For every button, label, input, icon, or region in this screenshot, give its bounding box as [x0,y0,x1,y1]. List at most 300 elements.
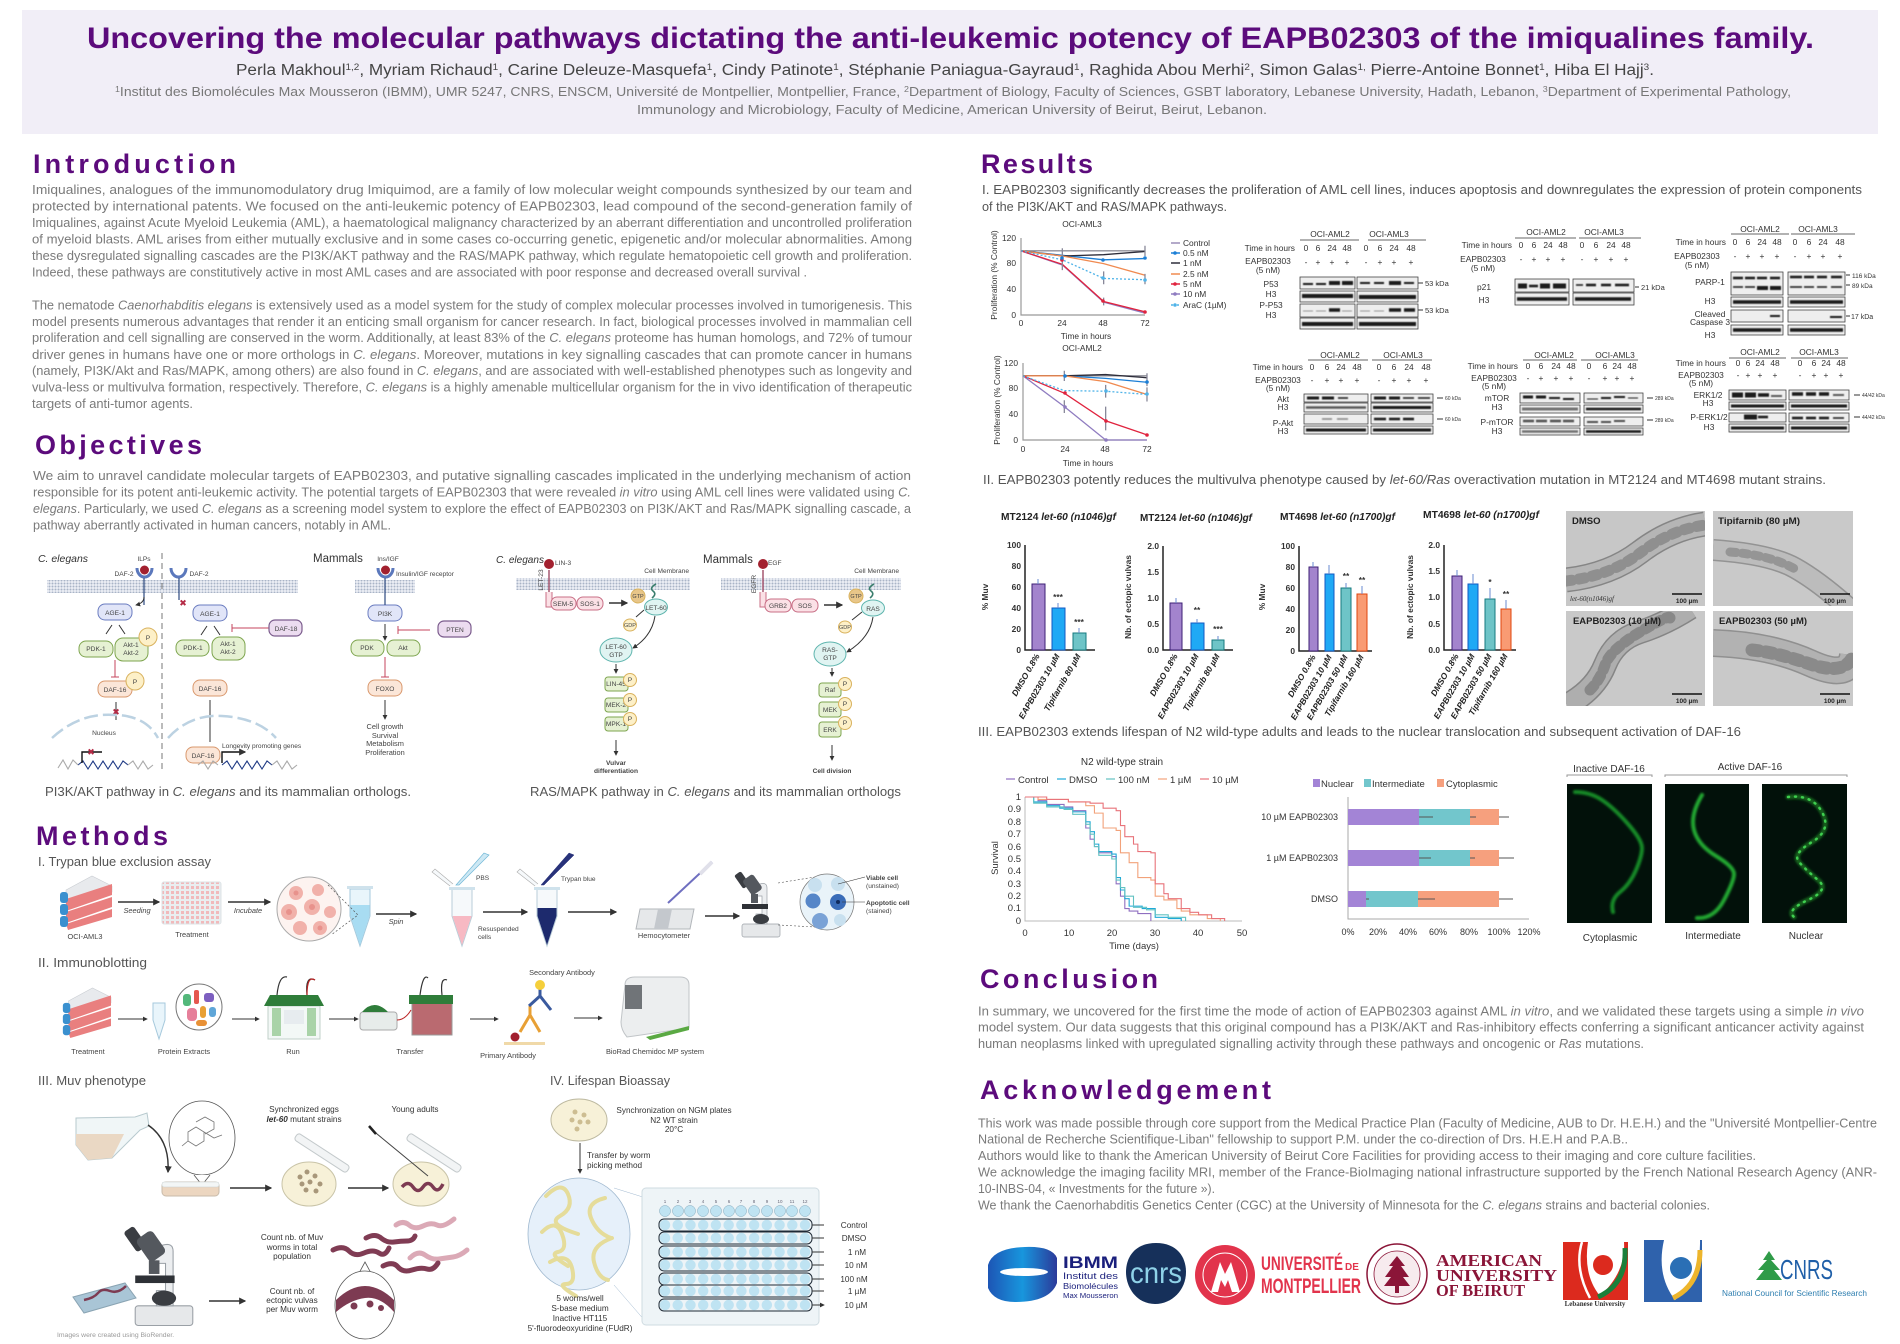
icon: tube with PBS: Resuspended [478,926,519,933]
icon: cells magnified [277,877,341,941]
micrograph: EAPB02303 10 µM: EAPB02303 (10 µM) [1573,616,1661,627]
diagram: PI3K/AKT pathway [38,553,471,770]
western blot: mTOR panel: (5 nM) [1482,381,1506,391]
western blot: PARP and caspase panel: - [1794,251,1797,261]
bar chart: MT4698 ectopic vulvas: 1.5 [1428,566,1440,576]
text: synchronization [616,1106,732,1134]
legend: concentrations: 10 nM [1183,289,1206,299]
bar chart: MT4698 ectopic vulvas: Nb. of ectopic vulvas [1405,555,1415,639]
stacked bar chart: DAF-16 localisation: 0% [1341,927,1355,937]
RAS activation: RAS [866,606,880,613]
bar chart: MT2124 ectopic vulvas: 2.0 [1147,541,1159,551]
text block: acknowledgement: This work was made possible through core support from the Medical Practice Plan (Faculty of Medicine, AUB to Dr. H.E.H.) and the "Université Montpellier-Centre [978,1116,1877,1130]
legend: concentrations [1171,238,1227,310]
western blot: Akt panel: (5 nM) [1266,383,1290,393]
western blot: PARP and caspase panel: H3 [1705,330,1716,340]
western blot: mTOR panel: mTOR [1485,393,1509,403]
western blot: Akt panel: + [1424,375,1429,385]
stacked bar chart: DAF-16 localisation [1261,779,1541,937]
survival chart: Time (days) [1109,941,1159,952]
western blot: ERK panel: (5 nM) [1689,378,1713,388]
survival chart: 20 [1107,928,1117,939]
header: active DAF-16: Active DAF-16 [1718,762,1783,773]
western blot: PARP and caspase panel: PARP-1 [1695,277,1725,287]
bar chart: MT4698 ectopic vulvas: DMSO 0.8% [1428,652,1461,698]
text block: objectives [33,469,911,532]
icon: hemocytometer [636,862,712,940]
survival legend: 1 µM [1170,775,1191,786]
line chart: OCI-AML3 proliferation: OCI-AML3 [1062,219,1102,229]
plate row labels: Control [841,1221,867,1230]
fluorescence panels: DAF-16 [1567,762,1847,944]
fluorescence panels: DAF-16: Cytoplasmic [1583,933,1637,944]
western blot: PARP and caspase panel: OCI-AML2 [1740,224,1780,234]
western blot: mTOR panel: - [1588,373,1591,383]
western blot: PARP and caspase panel: + [1807,251,1812,261]
text: synchronized eggs [266,1105,342,1124]
icon: tube with PBS: cells [478,934,492,941]
micrograph: DMSO: DMSO [1572,516,1600,527]
RAS activation: RAS- [822,647,838,654]
text block: introduction: these dysregulated signalling cascades are the PI3K/AKT pathway and the RAS/MAPK pathway, which regulate hematopoietic cell growth and proliferation. [32,249,912,263]
western blot: mTOR panel: 6 [1539,361,1544,371]
icon: flask [63,988,111,1038]
western blot: PARP and caspase panel: EAPB02303 [1674,251,1720,261]
panel: intermediate worm [1665,784,1749,923]
survival chart: 0.9 [1008,804,1021,815]
kinase cascade: C. elegans [605,674,636,731]
western blot: p21 panel: + [1624,254,1629,264]
logo: CNRS [1126,1243,1186,1304]
western blot: ERK panel: P-ERK1/2 [1690,412,1728,422]
authors: Perla Makhoul [236,62,335,79]
legend: concentrations: 1 nM [1183,258,1202,268]
nodes: AGE-1: AGE-1 [200,611,220,618]
icon: 96-well plate: 5 [715,1199,718,1204]
legend: cell staining: (stained) [866,908,892,915]
western blot: mTOR panel: + [1569,373,1574,383]
survival chart: 0 [1016,916,1021,927]
survival chart: Survival [990,841,1001,875]
authors: 1 [1074,62,1080,72]
western blot: P53 panel: 0 [1304,243,1309,253]
text: count vulvas: ectopic vulvas [266,1296,318,1305]
text: synchronization: N2 WT strain [650,1116,698,1125]
authors: . [1649,62,1654,79]
western blot: PARP and caspase panel: + [1821,251,1826,261]
micrograph: EAPB02303 10 µM [1566,608,1705,706]
bar chart: MT4698 ectopic vulvas: 2.0 [1428,540,1440,550]
western blot: Akt panel: + [1339,375,1344,385]
authors: 2 [1244,62,1250,72]
western blot: p21 panel: 24 [1606,240,1616,250]
icon: 96-well plate: 9 [766,1199,769,1204]
western blot: p21 panel: + [1609,254,1614,264]
icon: 96-well plate: 12 [802,1199,808,1204]
survival legend: Control [1018,775,1049,786]
outcome: vulvar differentiation [594,760,638,775]
bar chart: MT2124 percent Muv: 80 [1012,561,1021,571]
LET-60 activation: GDP [624,623,636,629]
GRB2 and SOS [765,599,818,612]
icon: stained cells [778,874,854,930]
bar chart: MT4698 percent Muv: EAPB02303 50 µM [1304,652,1350,722]
survival chart: 0.4 [1008,866,1021,877]
western blot: P53 panel: P-P53 [1259,300,1283,310]
western blot: p21 panel: OCI-AML2 [1526,227,1566,237]
line chart: OCI-AML3 proliferation: 120 [1002,233,1016,243]
bar chart: MT2124 percent Muv: % Muv [980,583,990,610]
western blot: ERK panel: - [1799,370,1802,380]
western blot: mTOR panel: + [1603,373,1608,383]
western blot: Akt panel: Akt [1277,394,1290,404]
bar chart: MT2124 percent Muv: 100 [1007,540,1021,550]
western blot: ERK panel: Time in hours [1676,358,1726,368]
western blot: mTOR panel: Time in hours [1468,361,1518,371]
western blot: ERK panel: + [1758,370,1763,380]
logo: IBMM: Institut des [1063,1271,1118,1282]
bar chart: MT4698 percent Muv: ** [1343,571,1350,581]
western blot: PARP and caspase panel: - [1734,251,1737,261]
western blot: p21 panel: (5 nM) [1471,263,1495,273]
plate row labels: 1 µM [848,1287,866,1296]
logo: Université de Montpellier: DE [1345,1262,1359,1273]
line chart: OCI-AML2 proliferation: 72 [1142,444,1152,454]
western blot: p21 panel: 48 [1558,240,1568,250]
mammalian outcomes: Cell growth [367,722,403,731]
western blot: p21 panel: - [1581,254,1584,264]
bar chart: MT4698 ectopic vulvas [1405,510,1541,721]
western blot: ERK panel: 44/42 kDa [1862,393,1885,399]
survival chart: 0.5 [1008,854,1021,865]
western blot: mTOR panel: P-mTOR [1481,417,1513,427]
diagram: PI3K/AKT pathway: Longevity promoting genes [222,743,302,750]
icon: protein extracts [153,984,222,1056]
text block: objectives: pathway aberrantly activated in human cancers, notably in AML. [33,518,391,532]
survival chart: 40 [1193,928,1203,939]
western blot: Akt panel: - [1311,375,1314,385]
survival legend: DMSO [1069,775,1098,786]
stacked bar chart: DAF-16 localisation: 80% [1460,927,1478,937]
icon: 96-well plate: 6 [728,1199,731,1204]
western blot: p21 panel: 24 [1543,240,1553,250]
plate row labels [812,1221,868,1310]
survival chart: 0.6 [1008,842,1021,853]
western blot: p21 panel: + [1594,254,1599,264]
western blot: mTOR panel: 24 [1612,361,1622,371]
text block: objectives: responsible for its potent anti-leukemic activity. The potential targets of EAPB02303 that were revealed in vitro using AML cell lines were validated using C. [33,486,911,500]
nodes: kinases: Akt-2 [220,649,236,656]
icon: tube with trypan blue: Trypan blue [561,876,596,883]
nodes: AGE-1 [98,604,402,621]
affiliations: Institut des Biomolécules Max Mousseron (IBMM), UMR 5247, CNRS, ENSCM, Université de Montpellier, Montpellier, France, [120,85,904,99]
icon: vulva zoom [335,1262,395,1339]
nodes: AGE-1: AGE-1 [105,610,125,617]
text block: acknowledgement: We thank the Caenorhabditis Genetics Center (CGC) at the University of Minnesota for the C. elegans strains and bacterial colonies. [978,1198,1710,1212]
icon: 96-well plate: 11 [790,1199,795,1204]
diagram: RAS/MAPK pathway: Cell Membrane [854,568,899,575]
mammalian receptor [377,556,455,605]
text: culture conditions: 5 worms/well [556,1294,604,1303]
western blot: Akt panel: + [1407,375,1412,385]
western blot: p21 panel: H3 [1479,295,1490,305]
western blot: Akt panel: Time in hours [1253,362,1303,372]
line chart: OCI-AML2 proliferation: 24 [1060,444,1070,454]
bar chart: MT2124 ectopic vulvas: Tipifarnib 80 µM [1181,651,1222,713]
fluorescence panels: DAF-16: Intermediate [1685,931,1741,942]
western blot: p21 panel: + [1546,254,1551,264]
legend: concentrations: 5 nM [1183,279,1202,289]
affiliations: 3 [1543,85,1548,94]
western blot: PARP and caspase panel: 89 kDa [1852,283,1873,290]
micrograph: DMSO: 100 µm [1676,598,1698,605]
text block: acknowledgement: National de Recherche Scientifique-Liban" fellowship to support P.M. under the co-direction of Drs. H.E.H and P.A.B.. [978,1132,1628,1146]
western blot: Akt panel: + [1325,375,1330,385]
western blot: mTOR panel [1468,350,1674,436]
authors: 1,2 [346,62,359,72]
logo: IBMM: Biomolécules [1063,1281,1118,1291]
western blot: mTOR panel: H3 [1492,402,1503,412]
bar chart: MT2124 percent Muv: 40 [1012,603,1021,613]
authors: 1 [833,62,839,72]
bar chart: MT2124 percent Muv: *** [1053,592,1064,602]
western blot: mTOR panel: OCI-AML2 [1534,350,1574,360]
line chart: OCI-AML3 proliferation: 0 [1011,310,1016,320]
LET-60 activation [600,584,668,662]
outcome: cell division: Cell division [813,768,851,775]
western blot: p21 panel: + [1532,254,1537,264]
line chart: OCI-AML3 proliferation: 0 [1019,318,1024,328]
text block: conclusion: In summary, we uncovered for the first time the mode of action of EAPB02303 against AML in vitro, and we validated these targets using a simple in vivo [978,1004,1864,1018]
western blot: mTOR panel: 48 [1627,361,1637,371]
nucleus membrane arcs [52,715,276,738]
western blot: PARP and caspase panel: 116 kDa [1852,273,1876,280]
text block: introduction: driver genes in humans have one or more orthologs in C. elegans. Moreover, mutations in key signalling cascades that can promote cancer in humans [32,348,912,362]
plate row labels: 10 nM [845,1261,868,1270]
authors: , Hiba El Hajj [1545,62,1644,79]
western blot: mTOR panel: 0 [1587,361,1592,371]
affiliations: 2 [904,85,910,94]
bar chart: MT4698 ectopic vulvas: EAPB02303 10 µM [1431,651,1477,721]
western blot: ERK panel: - [1737,370,1740,380]
kinase cascade: mammals: P [843,681,848,688]
western blot: ERK panel: 48 [1836,358,1846,368]
icon: microscope with slide [73,1226,193,1325]
GRB2 and SOS: SOS [798,603,813,610]
western blot: Akt panel: 60 kDa [1445,396,1461,402]
logo: American University of Beirut: UNIVERSITY [1436,1266,1557,1285]
western blot: ERK panel: 0 [1736,358,1741,368]
western blot: P53 panel: H3 [1266,289,1277,299]
western blot: Akt panel: H3 [1278,426,1289,436]
nodes: DAF-16 and FOXO: DAF-16 [192,753,215,760]
nodes: DAF-16 and FOXO: P [133,679,138,686]
western blot: PARP and caspase panel: 24 [1757,237,1767,247]
line chart: OCI-AML3 proliferation: 24 [1057,318,1067,328]
diagram: RAS/MAPK pathway: C. elegans [496,555,544,566]
icon: 96-well plate: 7 [740,1199,743,1204]
bar chart: MT2124 percent Muv: MT2124 let-60 (n1046)gf [1001,512,1118,523]
western blot: mTOR panel: + [1554,373,1559,383]
western blot: PARP and caspase panel [1674,224,1876,340]
LET-60 activation: GTP [609,652,623,659]
western blot: P53 panel: 48 [1406,243,1416,253]
stacked bar legend: Intermediate [1372,779,1425,790]
text: transfer: picking method [587,1161,643,1170]
bar chart: MT2124 percent Muv: 60 [1012,582,1021,592]
western blot: Akt panel: OCI-AML2 [1320,350,1360,360]
authors: 1 [1539,62,1545,72]
icon: 96-well plate: 10 [777,1199,783,1204]
text block: introduction: targets of anti-tumor agents. [32,397,193,411]
nodes: DAF-16 and FOXO [98,672,402,763]
logo: CNRS: cnrs [1130,1257,1182,1290]
western blot: ERK panel: + [1746,370,1751,380]
western blot: ERK panel: 24 [1755,358,1765,368]
authors: 1 [707,62,712,72]
stacked bar chart: DAF-16 localisation: 1 µM EAPB02303 [1266,853,1338,863]
bar chart: MT2124 percent Muv: EAPB02303 10 µM [1016,651,1062,721]
western blot: PARP and caspase panel: + [1746,251,1751,261]
western blot: ERK panel: 48 [1770,358,1780,368]
plate row labels: 1 nM [848,1248,866,1257]
authors: , Cindy Patinote [712,62,833,79]
text block: introduction: Imiqualines, analogues of the immunomodulatory drug Imiquimod, are a family of low molecular weight compounds synthesized by our team and [32,183,912,197]
title: Uncovering the molecular pathways dictating the anti-leukemic potency of EAPB02303 of the imiqualines family. [87,22,1814,55]
legend: concentrations: Control [1183,238,1210,248]
icon: power supply and transfer tank: Transfer [396,1047,424,1056]
text: synchronization: 20°C [665,1125,683,1134]
icon: worm dish with picker [369,1126,462,1206]
western blot: p21 panel: - [1520,254,1523,264]
bar chart: MT4698 ectopic vulvas: Tipifarnib 160 µM [1466,651,1510,717]
western blot: Akt panel: + [1355,375,1360,385]
diagram: PI3K/AKT pathway: Nucleus [92,730,117,737]
LET-23 receptor [538,559,571,607]
bar chart: MT2124 percent Muv: Tipifarnib 80 µM [1042,651,1083,713]
authors: , Stéphanie Paniagua-Gayraud [839,62,1074,79]
western blot: ERK panel: H3 [1703,398,1714,408]
western blot: PARP and caspase panel: + [1760,251,1765,261]
methods IV: lifespan bioassay [528,1073,868,1333]
survival chart: 1 [1016,792,1021,803]
western blot: Akt panel: EAPB02303 [1255,375,1301,385]
nodes: kinases [79,628,420,661]
legend: cell staining [838,875,910,915]
authors: , Myriam Richaud [359,62,493,79]
logo: American University of Beirut: AMERICAN [1436,1251,1543,1270]
line chart: OCI-AML3 proliferation: 40 [1007,284,1016,294]
SEM-5 and SOS-1 [551,597,603,610]
DNA strands [58,752,297,769]
western blot: P53 panel [1245,229,1450,329]
western blot: mTOR panel: 289 kDa [1655,418,1674,424]
bar chart: MT2124 ectopic vulvas: *** [1213,624,1224,634]
survival chart: N2 wild-type strain [1081,757,1163,768]
stacked bar legend: Cytoplasmic [1446,779,1498,790]
western blot: ERK panel: 44/42 kDa [1862,415,1885,421]
diagram: PI3K/AKT pathway: Mammals [313,553,363,565]
western blot: mTOR panel: 289 kDa [1655,396,1674,402]
RAS activation: GTP [850,594,862,600]
western blot: mTOR panel: 48 [1566,361,1576,371]
plate row labels: 10 µM [845,1301,868,1310]
micrograph: EAPB02303 50 µM [1713,611,1853,706]
legend: concentrations: 0.5 nM [1183,248,1209,258]
survival chart: 30 [1150,928,1160,939]
western blot: P53 panel: 24 [1389,243,1399,253]
western blot: Akt panel: OCI-AML3 [1383,350,1423,360]
icon: antibodies: Primary Antibody [480,1051,536,1060]
bar chart: MT2124 percent Muv: 0 [1016,645,1021,655]
western blot: ERK panel: + [1773,370,1778,380]
western blot: PARP and caspase panel: + [1775,251,1780,261]
stacked bar chart: DAF-16 localisation: 40% [1399,927,1417,937]
western blot: mTOR panel: 24 [1551,361,1561,371]
methods I: trypan blue assay [38,853,910,946]
stacked bar chart: DAF-16 localisation: DMSO [1311,894,1338,904]
GRB2 and SOS: GRB2 [769,603,787,610]
methods I: trypan blue assay: I. Trypan blue exclusion assay [38,854,212,869]
nodes: DAF-16 and FOXO: DAF-16 [199,686,222,693]
kinase cascade: C. elegans: MEK-2 [606,702,626,709]
authors: 3 [1644,62,1649,72]
bar chart: MT2124 ectopic vulvas: ** [1194,605,1201,615]
western blot: p21 panel: Time in hours [1462,240,1512,250]
icon: centrifuge tube [328,885,373,946]
western blot: ERK panel: ERK1/2 [1694,390,1723,400]
western blot: mTOR panel: H3 [1492,426,1503,436]
micrograph: EAPB02303 50 µM: 100 µm [1824,698,1846,705]
nodes: kinases: Akt-2 [123,650,139,657]
kinase cascade: mammals: P [843,701,848,708]
nodes: DAF-18 and PTEN: PTEN [446,627,464,634]
authors: , Carine Deleuze-Masquefa [498,62,707,79]
western blot: ERK panel: EAPB02303 [1678,370,1724,380]
western blot: ERK panel [1676,347,1885,432]
logo: American University of Beirut [1367,1244,1557,1304]
logo: Lebanese University: Lebanese University [1565,1300,1626,1308]
panel: nuclear worm [1762,784,1847,923]
EGFR receptor: EGFR [751,575,758,593]
line chart: OCI-AML3 proliferation: 48 [1098,318,1108,328]
western blot: PARP and caspase panel: 17 kDa [1851,314,1873,321]
authors: , Simon Galas [1250,62,1358,79]
survival legend [1006,775,1239,786]
logo: Université de Montpellier: UNIVERSITÉ [1261,1253,1343,1275]
western blot: p21 panel: 6 [1532,240,1537,250]
nodes: kinases: PDK-1 [86,646,106,653]
text block: introduction: Imiqualines, against Acute Myeloid Leukemia (AML), a haematological malignancy characterized by an aberrant differentiation and uncontrolled proliferation [32,216,912,230]
text block: acknowledgement: We acknowledge the imaging facility MRI, member of the France-BioImaging national infrastructure supported by the French National Research Agency (ANR- [978,1166,1877,1180]
icon: culture flask [60,876,112,930]
caption: PI3K/AKT: PI3K/AKT pathway in C. elegans and its mammalian orthologs. [45,784,411,799]
western blot: PARP and caspase panel: + [1838,251,1843,261]
text: culture conditions: Inactive HT115 [553,1314,608,1323]
icon: tube with PBS [432,853,519,946]
text block: objectives: We aim to unravel candidate molecular targets of EAPB02303, and putative signalling cascades implicated in the underlying mechanism of action [33,469,911,483]
western blot: P53 panel: H3 [1266,310,1277,320]
LET-60 activation: LET-60 [645,605,667,612]
stacked bar chart: DAF-16 localisation: 120% [1517,927,1541,937]
logo: American University of Beirut: OF BEIRUT [1436,1281,1526,1300]
western blot: PARP and caspase panel: 0 [1733,237,1738,247]
nodes: DAF-18 and PTEN [269,620,471,637]
methods I: trypan blue assay: Seeding [123,906,151,915]
bar chart: MT2124 percent Muv: DMSO 0.8% [1009,652,1042,698]
text: synchronized eggs: let-60 mutant strains [266,1115,342,1124]
receptor DAF-2 without ligand: ✖ [179,598,187,608]
